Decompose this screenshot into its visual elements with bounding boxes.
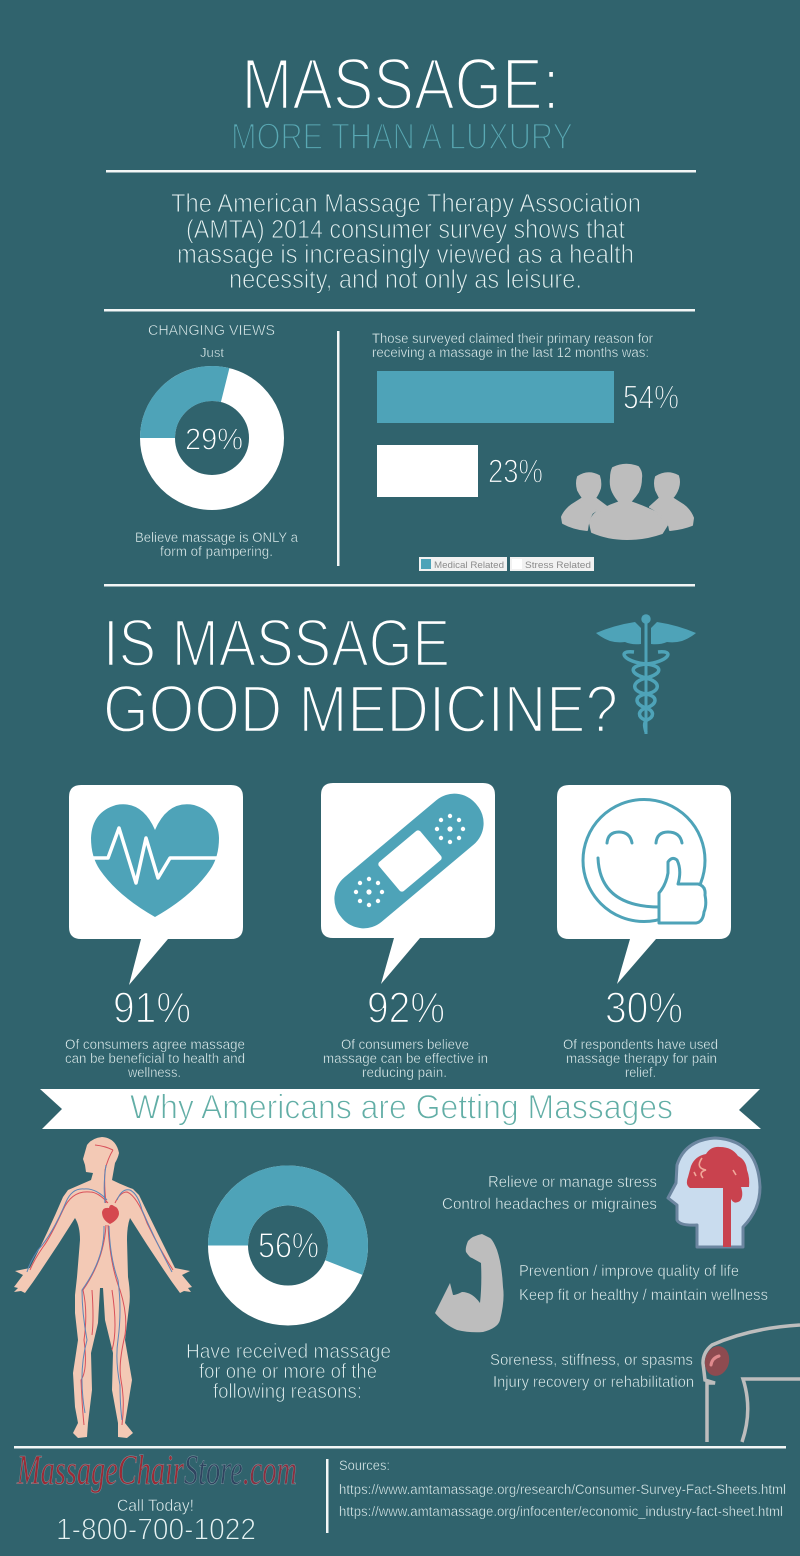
donut chart: 29%: [140, 366, 266, 492]
heading: changing views: CHANGING VIEWS: [148, 322, 275, 339]
sources: https://www.amtamassage.org/infocenter/economic_industry-fact-sheet.html: [339, 1504, 783, 1519]
banner: why americans are getting massages: Why Americans are Getting Massages: [130, 1088, 673, 1126]
donut caption: reasons: [186, 1341, 391, 1403]
logo: massagechairstore.com: MassageChairStore.com: [16, 1448, 297, 1494]
icon: bandage: [323, 782, 495, 940]
caption: 30%: massage therapy for pain: [566, 1051, 717, 1066]
intro paragraph: [171, 190, 641, 294]
caption: 30%: Of respondents have used: [563, 1037, 718, 1052]
caption: 91%: Of consumers agree massage: [65, 1037, 245, 1052]
donut chart: 29%: 29%: [185, 422, 243, 456]
caption: 91%: wellness.: [127, 1065, 181, 1080]
text: wellness reasons: Prevention / improve quality of life: [519, 1263, 739, 1280]
text: injury reasons: [490, 1352, 694, 1391]
legend: Stress Related: [525, 560, 591, 571]
bar: medical related 54%: 54%: [623, 378, 679, 416]
stat: 30%: 30%: [605, 984, 683, 1032]
icon: heart with pulse: [91, 804, 219, 917]
intro paragraph: The American Massage Therapy Association: [171, 190, 641, 218]
icon: group of people: [562, 465, 693, 539]
icon: smiley with thumbs up: [583, 800, 706, 923]
caption: 92%: Of consumers believe: [341, 1037, 469, 1052]
text: stress reasons: Relieve or manage stress: [488, 1174, 657, 1191]
panel: primary reason bar chart: [372, 331, 693, 571]
sources: Sources:: [339, 1458, 390, 1473]
donut caption: Believe massage is ONLY a: [135, 530, 298, 545]
bar: stress related 23%: [377, 445, 543, 497]
legend: [419, 557, 594, 571]
bar: stress related 23%: 23%: [488, 452, 543, 490]
donut caption: reasons: for one or more of the: [199, 1361, 377, 1383]
caption: 30%: relief.: [625, 1065, 656, 1080]
title: MASSAGE:: [242, 45, 560, 125]
speech bubble: [557, 785, 731, 984]
panel: changing views: [135, 322, 298, 559]
call to action: Call Today!: [117, 1496, 194, 1515]
panel: 91% health callout: [65, 785, 245, 1080]
call to action: 1-800-700-1022: [56, 1512, 256, 1546]
panel: 30% pain relief callout: [557, 785, 731, 1080]
icon: knee with sore joint: [702, 1325, 800, 1442]
intro paragraph: necessity, and not only as leisure.: [229, 266, 582, 294]
icon: caduceus: [596, 614, 696, 734]
bar: medical related 54%: [377, 371, 679, 423]
donut caption: [135, 530, 298, 559]
legend: Medical Related: [434, 560, 504, 571]
icon: flexed arm: [435, 1234, 504, 1332]
intro paragraph: massage is increasingly viewed as a health: [177, 241, 634, 269]
stat: 92%: 92%: [367, 984, 445, 1032]
call to action: [56, 1496, 256, 1546]
donut caption: form of pampering.: [160, 544, 273, 559]
label: just: Just: [200, 346, 225, 360]
heading: is massage good medicine: GOOD MEDICINE?: [103, 672, 618, 747]
heading: is massage good medicine: [103, 606, 618, 747]
caption: 92%: [323, 1037, 488, 1080]
illustration: human body circulatory system: [14, 1137, 192, 1438]
caption: 92%: massage can be effective in: [323, 1051, 488, 1066]
sources: https://www.amtamassage.org/research/Consumer-Survey-Fact-Sheets.html: [339, 1482, 786, 1497]
sources: [339, 1458, 786, 1519]
text: stress reasons: [442, 1174, 657, 1213]
donut caption: reasons: Have received massage: [186, 1341, 391, 1363]
caption: 91%: [65, 1037, 245, 1080]
donut chart: 56%: [208, 1165, 368, 1306]
title: [231, 45, 573, 157]
icon: head with brain: [668, 1138, 760, 1247]
caption: 30%: [563, 1037, 718, 1080]
heading: is massage good medicine: IS MASSAGE: [103, 606, 450, 681]
donut chart: 56%: 56%: [258, 1226, 319, 1266]
speech bubble: [69, 785, 243, 985]
text: injury reasons: Injury recovery or rehabilitation: [493, 1374, 694, 1391]
intro paragraph: (AMTA) 2014 consumer survey shows that: [186, 216, 625, 244]
speech bubble: [321, 783, 495, 984]
donut caption: reasons: following reasons:: [213, 1381, 362, 1403]
caption: 91%: can be beneficial to health and: [65, 1051, 245, 1066]
text: injury reasons: Soreness, stiffness, or spasms: [490, 1352, 693, 1369]
caption: 92%: reducing pain.: [362, 1065, 447, 1080]
title: MORE THAN A LUXURY: [231, 116, 573, 157]
panel: 92% pain callout: [321, 782, 495, 1080]
text: stress reasons: Control headaches or migraines: [442, 1196, 657, 1213]
bar chart intro text: [372, 331, 653, 360]
text: wellness reasons: Keep fit or healthy / maintain wellness: [519, 1287, 768, 1304]
bar chart intro text: receiving a massage in the last 12 months was:: [372, 345, 649, 360]
stat: 91%: 91%: [113, 984, 191, 1032]
text: wellness reasons: [519, 1263, 768, 1304]
bar chart intro text: Those surveyed claimed their primary reason for: [372, 331, 653, 346]
